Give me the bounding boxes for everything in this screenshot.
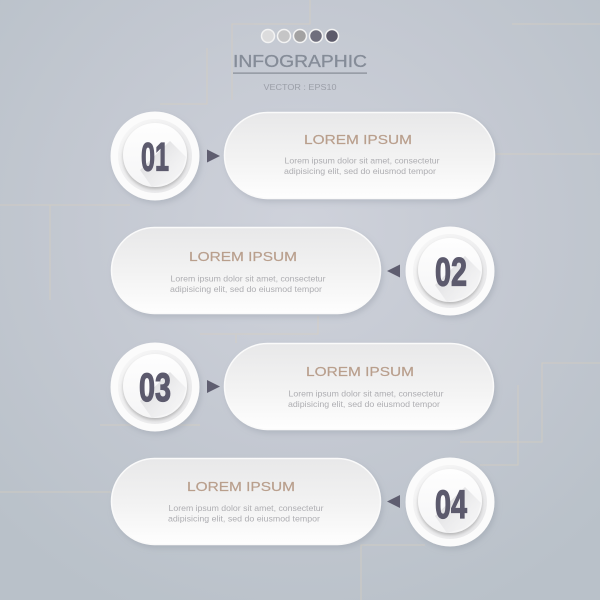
step 04 <box>112 458 494 546</box>
pill <box>224 112 494 198</box>
body text: Lorem ipsum dolor sit amet, consectetur <box>168 503 324 513</box>
body text: Lorem ipsum dolor sit amet, consectetur <box>170 274 326 284</box>
number badge <box>406 226 494 316</box>
number badge: 01 <box>141 136 169 180</box>
arrow <box>387 495 400 508</box>
number badge <box>406 458 494 546</box>
heading: LOREM IPSUM <box>306 364 414 379</box>
heading: LOREM IPSUM <box>189 249 297 264</box>
step 02 <box>112 226 494 316</box>
arrow <box>207 380 220 393</box>
heading: LOREM IPSUM <box>304 132 412 147</box>
number badge: 04 <box>435 483 468 527</box>
header <box>233 30 367 92</box>
number badge <box>110 112 200 200</box>
pill <box>112 458 380 544</box>
step 01 <box>110 112 494 200</box>
body text: Lorem ipsum dolor sit amet, consectetur <box>284 156 440 166</box>
color dots <box>262 30 338 42</box>
number badge: 02 <box>435 250 467 294</box>
step 01: adipisicing elit, sed do eiusmod tempor <box>284 166 436 176</box>
heading: LOREM IPSUM <box>187 479 295 494</box>
step 03: adipisicing elit, sed do eiusmod tempor <box>288 399 440 409</box>
pill <box>112 228 380 314</box>
title rule <box>233 72 367 74</box>
number badge <box>110 342 200 432</box>
step 04: adipisicing elit, sed do eiusmod tempor <box>168 514 320 524</box>
body text: Lorem ipsum dolor sit amet, consectetur <box>288 388 444 398</box>
arrow <box>387 264 400 278</box>
subtitle: VECTOR : EPS10 <box>264 83 337 92</box>
step 02: adipisicing elit, sed do eiusmod tempor <box>170 284 322 294</box>
number badge: 03 <box>139 366 171 410</box>
pill <box>224 344 494 430</box>
step 03 <box>110 342 494 432</box>
title: INFOGRAPHIC <box>233 51 367 71</box>
arrow <box>207 150 220 162</box>
